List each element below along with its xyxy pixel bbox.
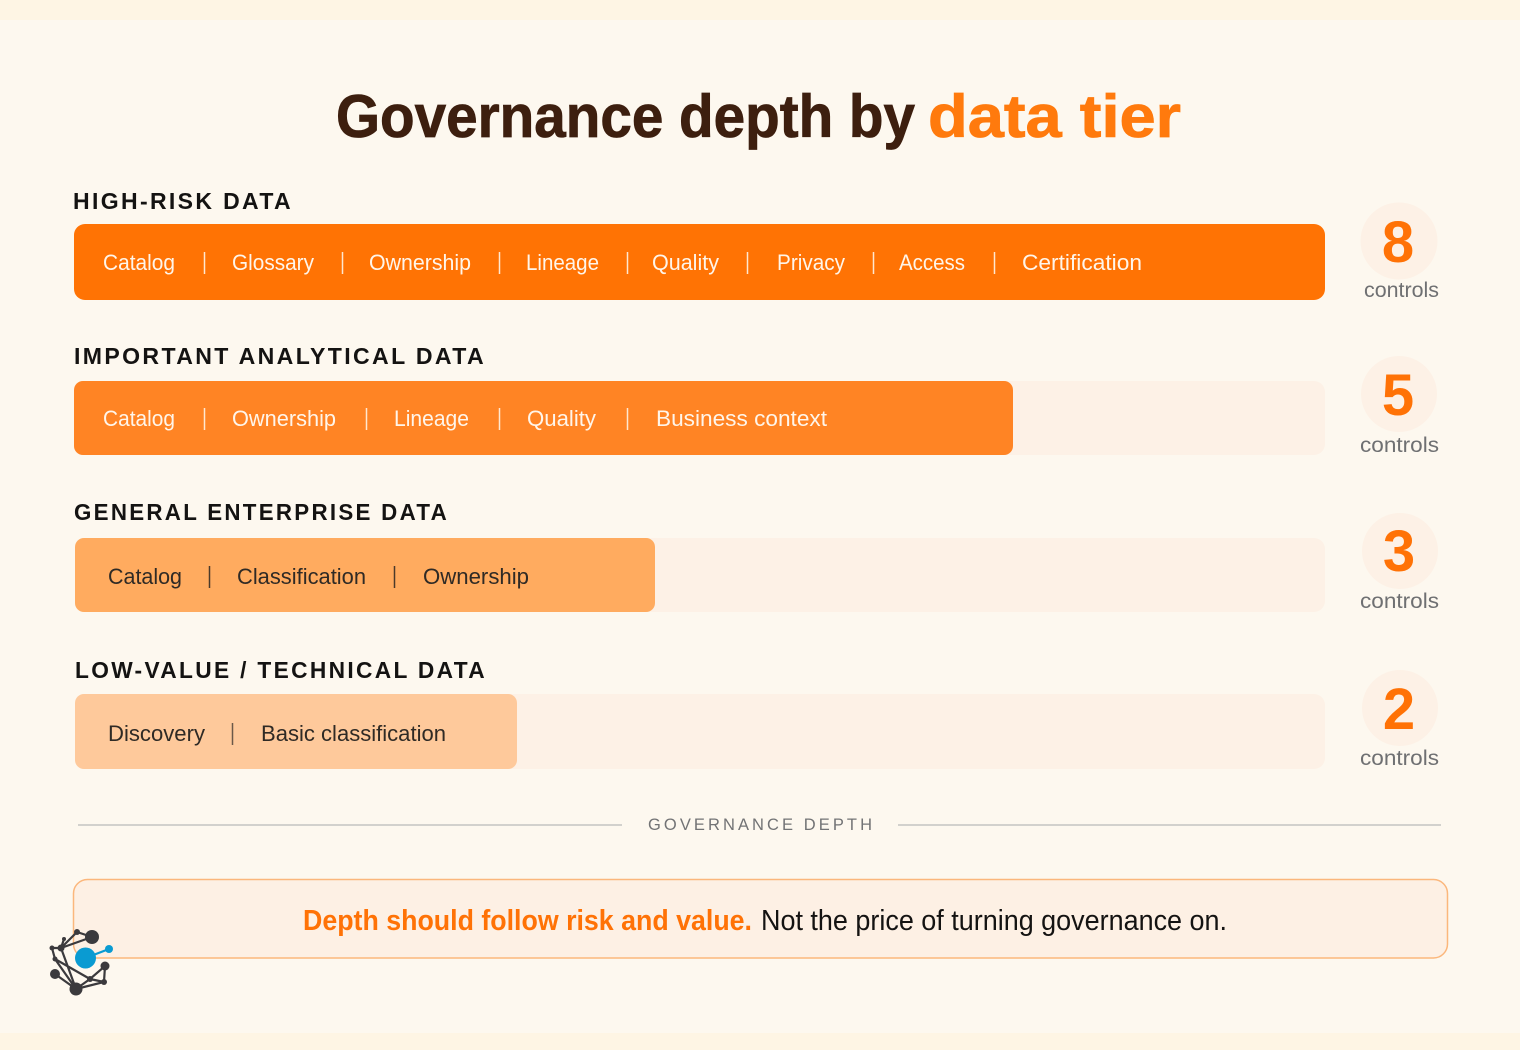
count badge: 3 controls: controls [1360,589,1439,613]
panel: low-value / technical data tier [75,657,1439,770]
count badge: 8 controls: controls [1364,278,1439,302]
count badge: 8 controls [1360,202,1439,302]
bar: 3 controls: Classification [237,564,366,589]
panel: important analytical data tier [74,343,1439,457]
title: Governance depth by [336,83,916,150]
callout: Not the price of turning governance on. [761,905,1227,937]
panel: high-risk data tier [73,188,1439,302]
bar: 8 controls: Ownership [369,250,471,275]
count badge: 5 controls: controls [1360,433,1439,457]
count badge: 5 controls [1360,356,1439,457]
count badge: 3 controls [1360,513,1439,613]
bar: 8 controls: Lineage [526,250,599,275]
count badge: 2 controls: 2 [1383,677,1415,742]
bar: 8 controls: Privacy [777,250,845,275]
bar: 5 controls: Ownership [232,406,336,431]
bar: 5 controls: Catalog [103,406,175,431]
title: data tier [928,83,1181,150]
icon: network logo [50,929,113,996]
panel: general enterprise data tier [74,499,1439,613]
bar: 8 controls: Certification [1022,250,1142,275]
bar: 5 controls: Business context [656,406,827,431]
bar: 8 controls: Glossary [232,250,314,275]
bar: 2 controls [75,694,1325,769]
bar: 3 controls [75,538,1325,612]
heading: general enterprise data: GENERAL ENTERPRISE DATA [74,499,449,525]
count badge: 2 controls [1360,670,1439,770]
bar: 5 controls: Quality [527,406,596,431]
bar: 3 controls: Catalog [108,564,182,589]
bar: 8 controls: Quality [652,250,719,275]
count badge: 3 controls: 3 [1383,519,1415,584]
bar: 3 controls: Ownership [423,564,529,589]
bar: 2 controls: Discovery [108,721,205,746]
bar: 8 controls: Catalog [103,250,175,275]
bar: 8 controls: Access [899,250,965,275]
bar: 2 controls: Basic classification [261,721,446,746]
heading: high-risk data: HIGH-RISK DATA [73,188,293,214]
count badge: 2 controls: controls [1360,746,1439,770]
heading: important analytical data: IMPORTANT ANALYTICAL DATA [74,343,486,369]
callout: Depth should follow risk and value. [303,905,752,937]
heading: low-value / technical data: LOW-VALUE / TECHNICAL DATA [75,657,487,683]
axis: governance depth: GOVERNANCE DEPTH [648,816,872,834]
count badge: 8 controls: 8 [1382,210,1414,275]
bar: 8 controls [74,224,1325,300]
bar: 5 controls [74,381,1325,455]
bar: 5 controls: Lineage [394,406,469,431]
count badge: 5 controls: 5 [1382,363,1414,428]
callout [74,880,1448,958]
